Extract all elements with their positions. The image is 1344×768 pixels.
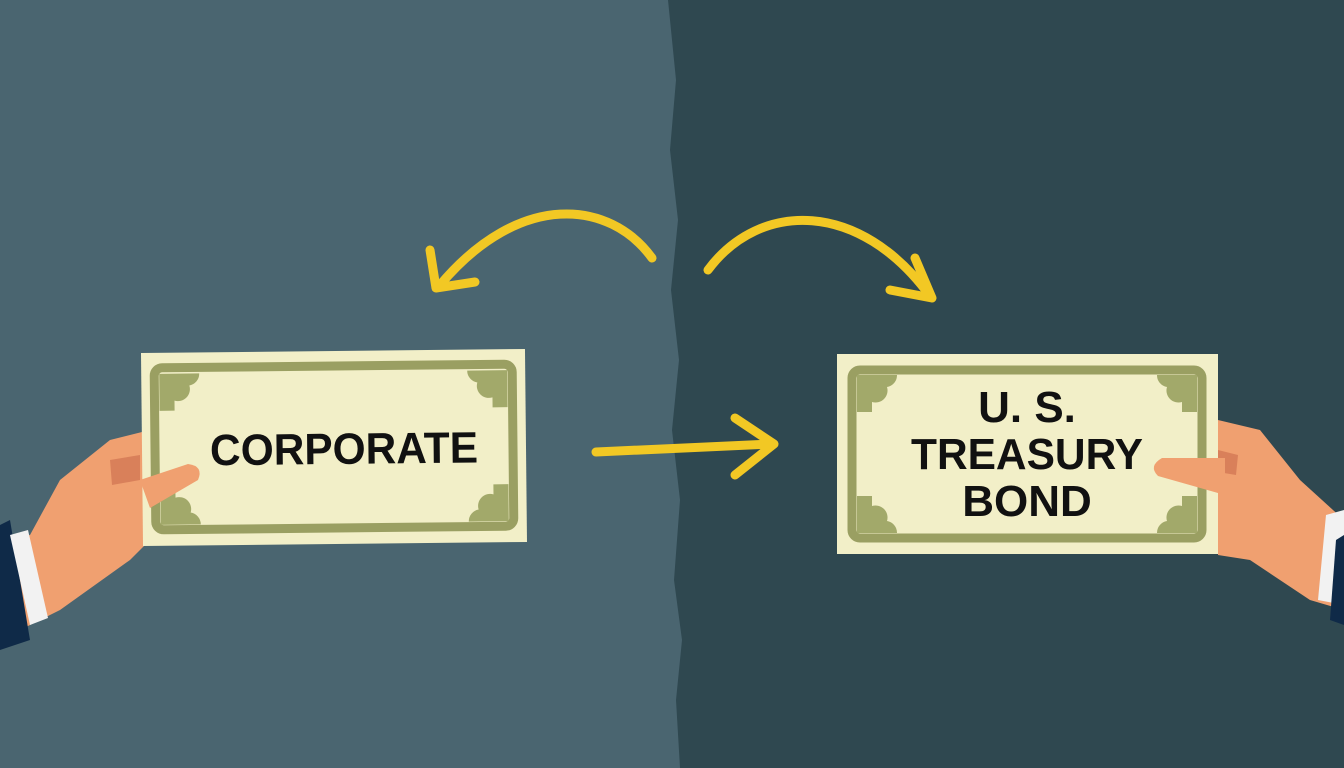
bill text: US treasury bond: U. S.	[978, 383, 1076, 432]
left hand	[0, 430, 150, 650]
bill: US treasury bond	[837, 354, 1218, 554]
right hand	[1218, 420, 1344, 625]
bill text: corporate: CORPORATE	[210, 423, 478, 475]
arrow: middle straight	[596, 418, 774, 475]
arrow: top left curved	[430, 214, 652, 288]
bill: US treasury bond: TREASURY	[911, 430, 1143, 479]
arrow: top right curved	[708, 220, 932, 298]
left thumb	[140, 464, 200, 508]
right thumb	[1154, 458, 1225, 495]
bill: US treasury bond: BOND	[962, 477, 1092, 526]
bill: corporate	[141, 349, 527, 546]
